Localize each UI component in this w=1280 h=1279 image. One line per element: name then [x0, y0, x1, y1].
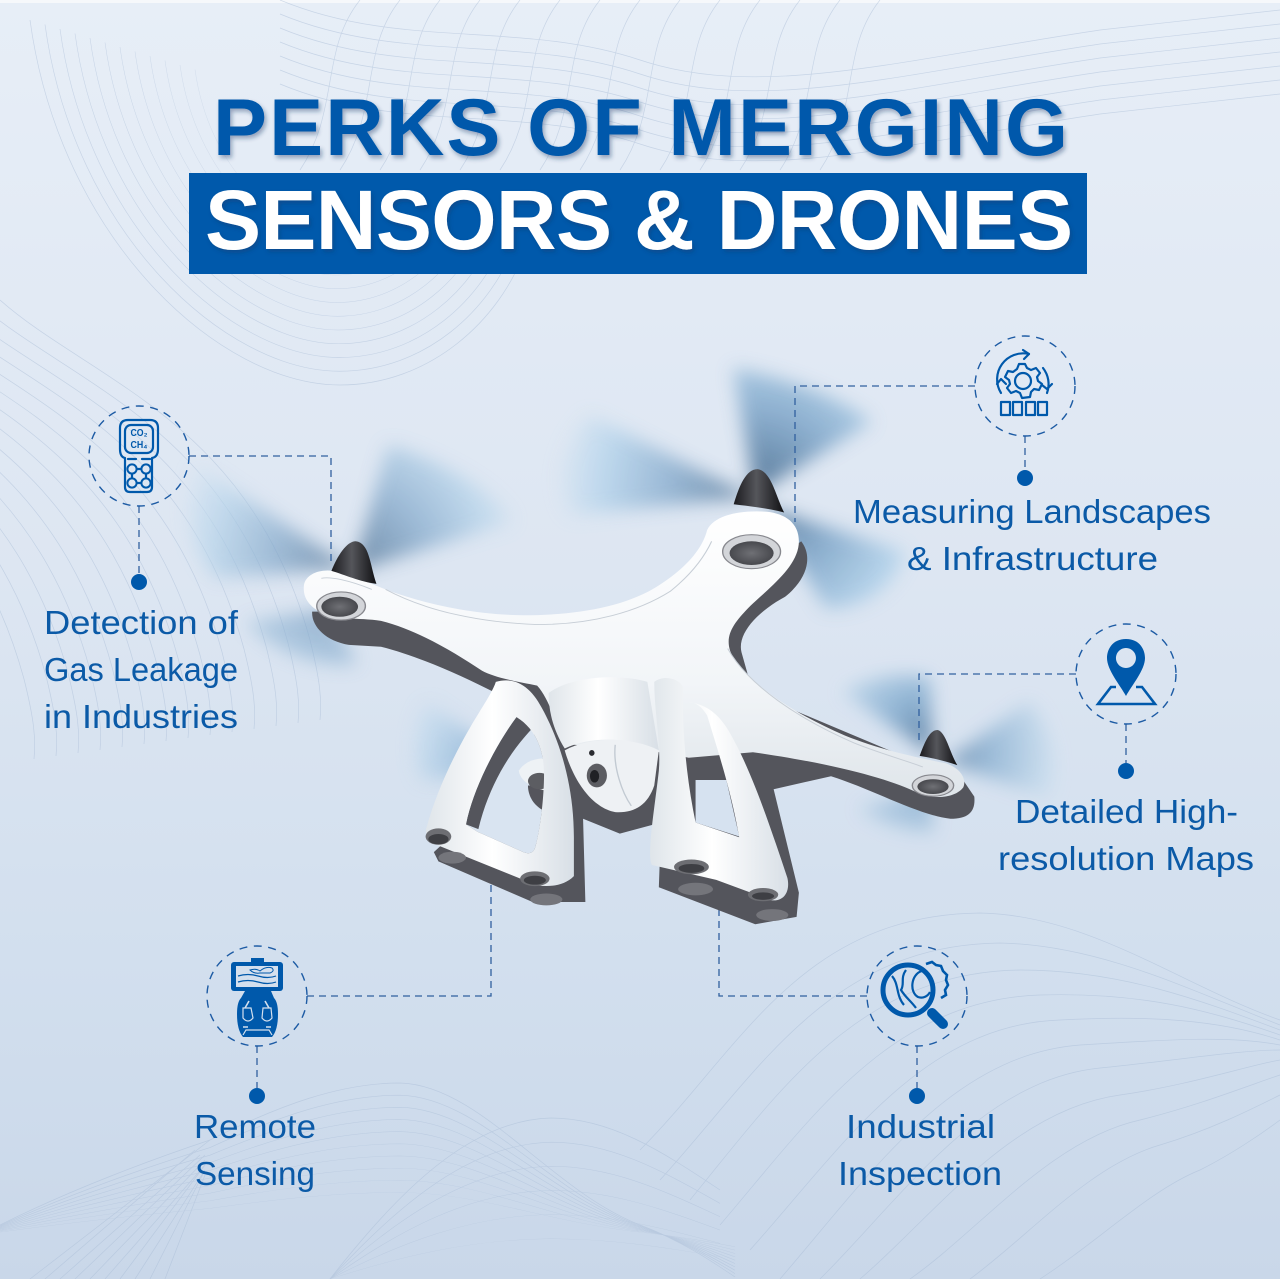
- callout: industrial inspection: [838, 946, 1002, 1192]
- label: remote sensing: [194, 1108, 316, 1192]
- propeller blur: rear right: [561, 368, 905, 608]
- label: gas leakage: [44, 604, 239, 735]
- marker dot: [131, 574, 147, 590]
- label: high-resolution maps: [998, 793, 1254, 877]
- propeller blur: front right: [842, 675, 1053, 832]
- drone arm highlight: [321, 541, 923, 767]
- label: industrial inspection: [838, 1108, 1002, 1192]
- callout: gas leakage: [44, 406, 239, 735]
- propeller blur: rear left: [189, 445, 512, 665]
- icon: gear with cycle arrows: [975, 336, 1075, 436]
- icon: remote controller with phone: [207, 946, 307, 1046]
- label: industrial inspection: Industrial: [846, 1108, 995, 1145]
- title line two: SENSORS & DRONES: [205, 173, 1073, 267]
- drone pods: [317, 535, 954, 796]
- title: [189, 83, 1087, 274]
- label: remote sensing: Sensing: [195, 1155, 315, 1192]
- drone camera lens: [587, 750, 607, 787]
- label: industrial inspection: Inspection: [838, 1155, 1002, 1192]
- drone gap: dark strip: [466, 717, 533, 829]
- drone left leg and frame: [426, 680, 574, 886]
- marker dot: [1017, 470, 1033, 486]
- drone camera housing: [549, 677, 659, 750]
- propeller blur: front left: [415, 703, 530, 834]
- title banner: [189, 173, 1087, 274]
- icon: magnifier over gear: [867, 946, 967, 1046]
- marker dot: [249, 1088, 265, 1104]
- icon: map pin: [1076, 624, 1176, 724]
- drone: [304, 469, 974, 924]
- label: gas leakage: in Industries: [44, 698, 238, 735]
- marker dot: [909, 1088, 925, 1104]
- label: measuring landscapes: [853, 493, 1211, 577]
- drone gap: left frame opening: [466, 717, 544, 853]
- icon: gas detector: CH₄: [130, 440, 148, 451]
- callout: high-resolution maps: [998, 624, 1254, 877]
- label: measuring landscapes: Measuring Landscapes: [853, 493, 1211, 530]
- drone feet: [426, 828, 788, 921]
- title line one: PERKS OF MERGING: [213, 83, 1068, 173]
- label: remote sensing: Remote: [194, 1108, 316, 1145]
- drone body: [304, 511, 964, 797]
- label: high-resolution maps: Detailed High-: [1015, 793, 1238, 830]
- drone shadow: [312, 541, 974, 924]
- drone camera dome: [565, 740, 659, 812]
- marker dot: [1118, 763, 1134, 779]
- label: gas leakage: Gas Leakage: [44, 651, 238, 688]
- drone right leg: [650, 678, 788, 900]
- icon: gas detector: [89, 406, 189, 506]
- label: gas leakage: Detection of: [44, 604, 239, 641]
- label: measuring landscapes: & Infrastructure: [907, 540, 1158, 577]
- callout: measuring landscapes: [853, 336, 1211, 577]
- label: high-resolution maps: resolution Maps: [998, 840, 1254, 877]
- drone motor cones: [331, 469, 957, 765]
- drone gap: right arm opening: [696, 780, 739, 837]
- drone rear pod: [519, 758, 565, 819]
- icon: gas detector: CO₂: [130, 428, 148, 439]
- callout: remote sensing: [194, 946, 316, 1192]
- connector lines: [139, 386, 1126, 1088]
